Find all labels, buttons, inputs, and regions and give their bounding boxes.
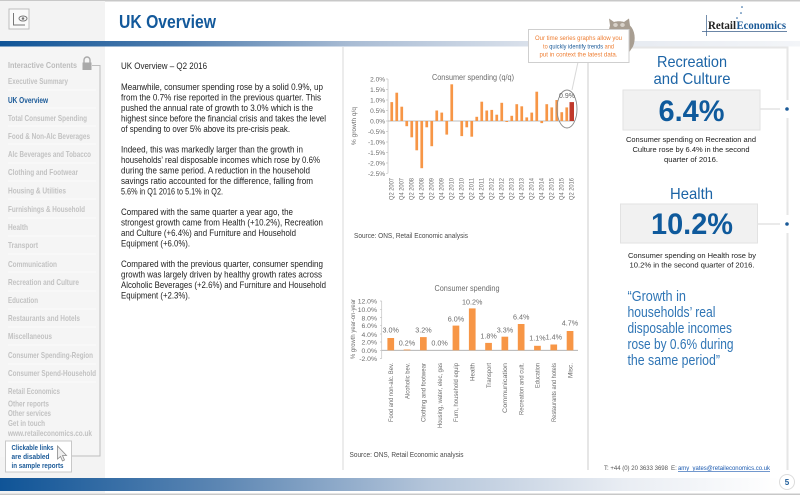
chart: consumer spending by category: Recreation and cult. [518,363,525,415]
chart: consumer spending q/q: Q2 2011 [470,177,476,200]
chart: consumer spending by category: 10.0% [358,307,377,314]
chart: consumer spending by category: Transport [486,363,493,388]
pull quote [628,289,734,369]
chart: consumer spending by category: 3.3% [497,326,514,334]
callout: time series [528,30,629,62]
chart: consumer spending by category: 10.2% [462,298,483,306]
caption: health [628,251,756,270]
body text: households’ real disposable incomes which rose by 0.6% [121,155,320,166]
chart: consumer spending by category: Clothing and footwear [421,362,428,422]
chart: consumer spending by category: Communication [502,363,509,413]
title: UK Overview [119,11,217,32]
stat: 6.4%: 6.4% [658,95,724,128]
callout: links disabled: are disabled [12,454,50,461]
chart: consumer spending q/q: Q4 2010 [460,177,466,200]
caption: recreation: Culture rose by 6.4% in the second [632,145,750,154]
sidebar navigation: www.retaileconomics.co.uk [7,429,92,438]
contact details: amy_yates@retaileconomics.co.uk [678,465,771,472]
connector marker [757,217,794,231]
chart: consumer spending q/q: Q2 2015 [550,177,556,200]
icon: mouse cursor [58,446,66,461]
chart: consumer spending by category: 2.0% [362,340,377,346]
chart: consumer spending q/q: Q2 2007 [390,177,396,200]
sidebar navigation: Consumer Spend-Household [8,369,96,378]
icon: padlock [82,57,92,70]
chart: consumer spending q/q: Q2 2009 [430,177,436,200]
highlight ellipse [557,90,577,128]
body text [121,61,326,302]
body text: Indeed, this was markedly larger than the growth in [121,144,303,156]
sidebar navigation: Transport [8,241,38,250]
callout: time series: to quickly identify trends and [543,44,614,50]
callout: links disabled: Clickable links [12,445,54,452]
chart: consumer spending by category: 6.0% [448,314,465,324]
body text: 5.6% in Q1 2016 to 5.1% in Q2. [121,186,223,197]
body text: Compared with the previous quarter, consumer spending [121,259,323,270]
chart: consumer spending q/q: Q4 2007 [400,177,406,200]
chart: consumer spending by category [350,284,579,428]
body text: Compared with the same quarter a year ago, the [121,207,293,218]
chart: consumer spending by category: 1.4% [546,332,563,342]
sidebar navigation: Executive Summary [8,77,68,86]
icon: chart logo [9,9,29,29]
body text: growth was largely driven by healthy growth rates across [121,270,322,280]
chart: consumer spending by category: Restaurants and hotels [551,362,558,422]
chart: consumer spending by category: 8.0% [362,316,377,322]
pull quote: the same period” [628,353,720,369]
highlighted bar: Q2 2016 [570,102,574,121]
sidebar navigation: Retail Economics [8,387,60,396]
chart: consumer spending by category: Alcoholic bev. [404,363,411,399]
sidebar heading: Interactive Contents [8,61,77,70]
chart: consumer spending q/q: Consumer spending (q/q) [432,73,514,82]
body text: Equipment (+6.0%). [121,238,190,249]
chart: consumer spending by category: 1.8% [480,332,497,340]
callout: links disabled: in sample reports [12,463,64,470]
body text: highest since before the financial crisis and takes the level [121,114,326,124]
chart: consumer spending q/q: Q4 2008 [420,177,426,200]
stat: 10.2% [620,204,758,243]
caption: health: Consumer spending on Health rose by [628,251,756,260]
sidebar navigation: Miscellaneous [8,332,52,341]
pull quote: disposable incomes [628,321,732,337]
page number: 5 [785,478,790,487]
chart: consumer spending q/q: 0.0% [370,118,385,125]
chart: consumer spending q/q: Q2 2012 [490,177,496,200]
contact details: T: +44 (0) 20 3633 3698 [604,465,669,472]
chart: consumer spending q/q: Q2 2016 [570,177,576,200]
chart: consumer spending q/q: 0.5% [370,108,385,115]
chart: consumer spending by category: Health [470,363,476,381]
owl mascot [592,18,635,52]
chart: consumer spending q/q: Q4 2015 [560,177,566,200]
pull quote: “Growth in [628,289,686,305]
pull quote: households’ real [628,305,716,321]
chart: consumer spending q/q: Q4 2014 [540,177,546,200]
active menu item: UK Overview [8,96,48,105]
connector marker [760,102,794,116]
chart: consumer spending by category: Housing, water, elec, gas [437,362,444,428]
chart: consumer spending by category: 0.0% [431,338,448,348]
chart: consumer spending q/q [351,73,577,200]
chart: consumer spending q/q: % growth q/q [351,107,358,145]
source note: chart 2: Source: ONS, Retail Economic analysis [350,450,464,459]
chart: consumer spending by category: 3.0% [383,326,399,334]
chart: consumer spending by category: 3.2% [415,326,432,334]
sidebar navigation: Consumer Spending-Region [8,351,93,360]
sidebar navigation: Recreation and Culture [8,278,79,287]
chart: consumer spending by category: 1.1% [529,334,546,342]
caption: health: 10.2% in the second quarter of 2016. [630,260,754,270]
heading: Recreation and Culture: Recreation [657,54,727,71]
chart: consumer spending q/q: -0.5% [368,129,385,136]
heading: Recreation and Culture: and Culture [654,71,731,88]
chart: consumer spending by category: 4.0% [362,332,377,339]
source note: chart 1: Source: ONS, Retail Economic analysis [354,231,468,240]
chart: consumer spending by category: Misc. [567,363,574,378]
pull quote: rose by 0.6% during [628,337,734,353]
sidebar navigation: Alc Beverages and Tobacco [8,150,91,159]
page number [780,474,794,490]
chart: consumer spending q/q: Q2 2013 [510,177,516,200]
logo: Retail Economics [702,6,787,36]
chart: consumer spending by category: Consumer spending [434,284,500,293]
body text: Alcoholic Beverages (+2.6%) and Furniture and Household [121,280,326,291]
header band [0,41,800,46]
caption: recreation: Consumer spending on Recreation and [626,135,756,144]
caption: recreation [626,135,756,164]
body text: and Culture (+6.4%) and Furniture and Household [121,228,296,239]
sidebar navigation: Housing & Utilities [8,186,66,196]
sidebar navigation: Other services [8,409,51,418]
highlight ellipse: 0.9% [559,93,575,100]
chart: consumer spending by category: 6.0% [362,323,377,330]
stat: 6.4% [623,90,760,130]
chart: consumer spending q/q: 1.0% [370,97,385,104]
body text: savings ratio accounted for the difference, falling from [121,176,313,187]
sidebar navigation: Health [8,223,28,232]
chart: consumer spending by category: 6.4% [513,312,530,322]
heading: Health: Health [670,186,713,203]
chart: consumer spending q/q: -2.5% [368,171,385,178]
sidebar navigation: Education [8,296,38,305]
body text: during the same period. A reduction in the household [121,165,310,176]
logo: Retail Economics: Retail [708,20,736,32]
contact details [604,465,771,472]
chart: consumer spending q/q: 2.0% [370,76,385,84]
chart: consumer spending q/q: -1.0% [368,139,385,146]
sidebar navigation: Furnishings & Household [8,205,85,214]
heading: Recreation and Culture [654,54,731,88]
chart: consumer spending by category: 12.0% [358,298,377,306]
body text: Meanwhile, consumer spending rose by a solid 0.9%, up [121,82,323,93]
chart: consumer spending q/q: Q2 2008 [410,177,416,200]
callout: time series: Our time series graphs allow you [535,35,622,42]
sidebar navigation: Get in touch [8,419,45,428]
logo: Retail Economics: Economics [736,20,786,32]
body text: from the 0.7% rise reported in the previous quarter. This [121,92,321,104]
callout: time series: put in context the latest data. [540,52,618,58]
footer band [0,478,780,491]
body text: Equipment (+2.3%). [121,290,190,302]
sidebar navigation [0,1,105,493]
body text: pushed the annual rate of growth to 3.0% which is the [121,103,313,114]
chart: consumer spending q/q: Q4 2011 [480,177,486,200]
sidebar navigation: Restaurants and Hotels [8,314,80,323]
sidebar navigation: Other reports [8,400,49,408]
sidebar navigation: Clothing and Footwear [8,168,79,177]
chart: consumer spending q/q: -1.5% [368,150,385,157]
chart: consumer spending by category: Education [535,363,542,388]
contact details: E: [671,465,677,472]
chart: consumer spending q/q: Q2 2014 [530,177,536,200]
chart: consumer spending q/q: -2.0% [368,160,385,167]
chart: consumer spending q/q: Q4 2012 [500,177,506,200]
connector to highlight [572,62,578,90]
sidebar navigation: Food & Non-Alc Beverages [8,132,90,141]
chart: consumer spending by category: 4.7% [562,318,579,328]
chart: consumer spending q/q: Q4 2009 [440,177,446,200]
chart: consumer spending by category: 0.2% [399,338,416,348]
sidebar navigation: Communication [8,260,57,269]
chart: consumer spending by category: 0.0% [362,348,377,355]
chart: consumer spending by category: % growth year-on-year [350,298,357,359]
body text: UK Overview – Q2 2016 [121,61,207,72]
chart: consumer spending q/q: 1.5% [370,87,385,94]
panel: key figures [588,48,794,472]
callout: links disabled [6,441,72,472]
chart: consumer spending q/q: Q2 2010 [450,177,456,200]
chart: consumer spending by category: -2.0% [359,356,377,363]
body text: strongest growth came from Health (+10.2%), Recreation [121,217,323,228]
chart: consumer spending q/q: Q4 2013 [520,177,526,200]
sidebar navigation: Total Consumer Spending [8,114,87,123]
chart: consumer spending by category: Furn, household equip [453,363,460,422]
body text: of spending to over 5% above its pre-crisis peak. [121,124,290,135]
chart: consumer spending by category: Food and non-alc. Bev. [388,363,395,422]
stat: 10.2%: 10.2% [651,208,733,241]
caption: recreation: quarter of 2016. [664,155,718,164]
